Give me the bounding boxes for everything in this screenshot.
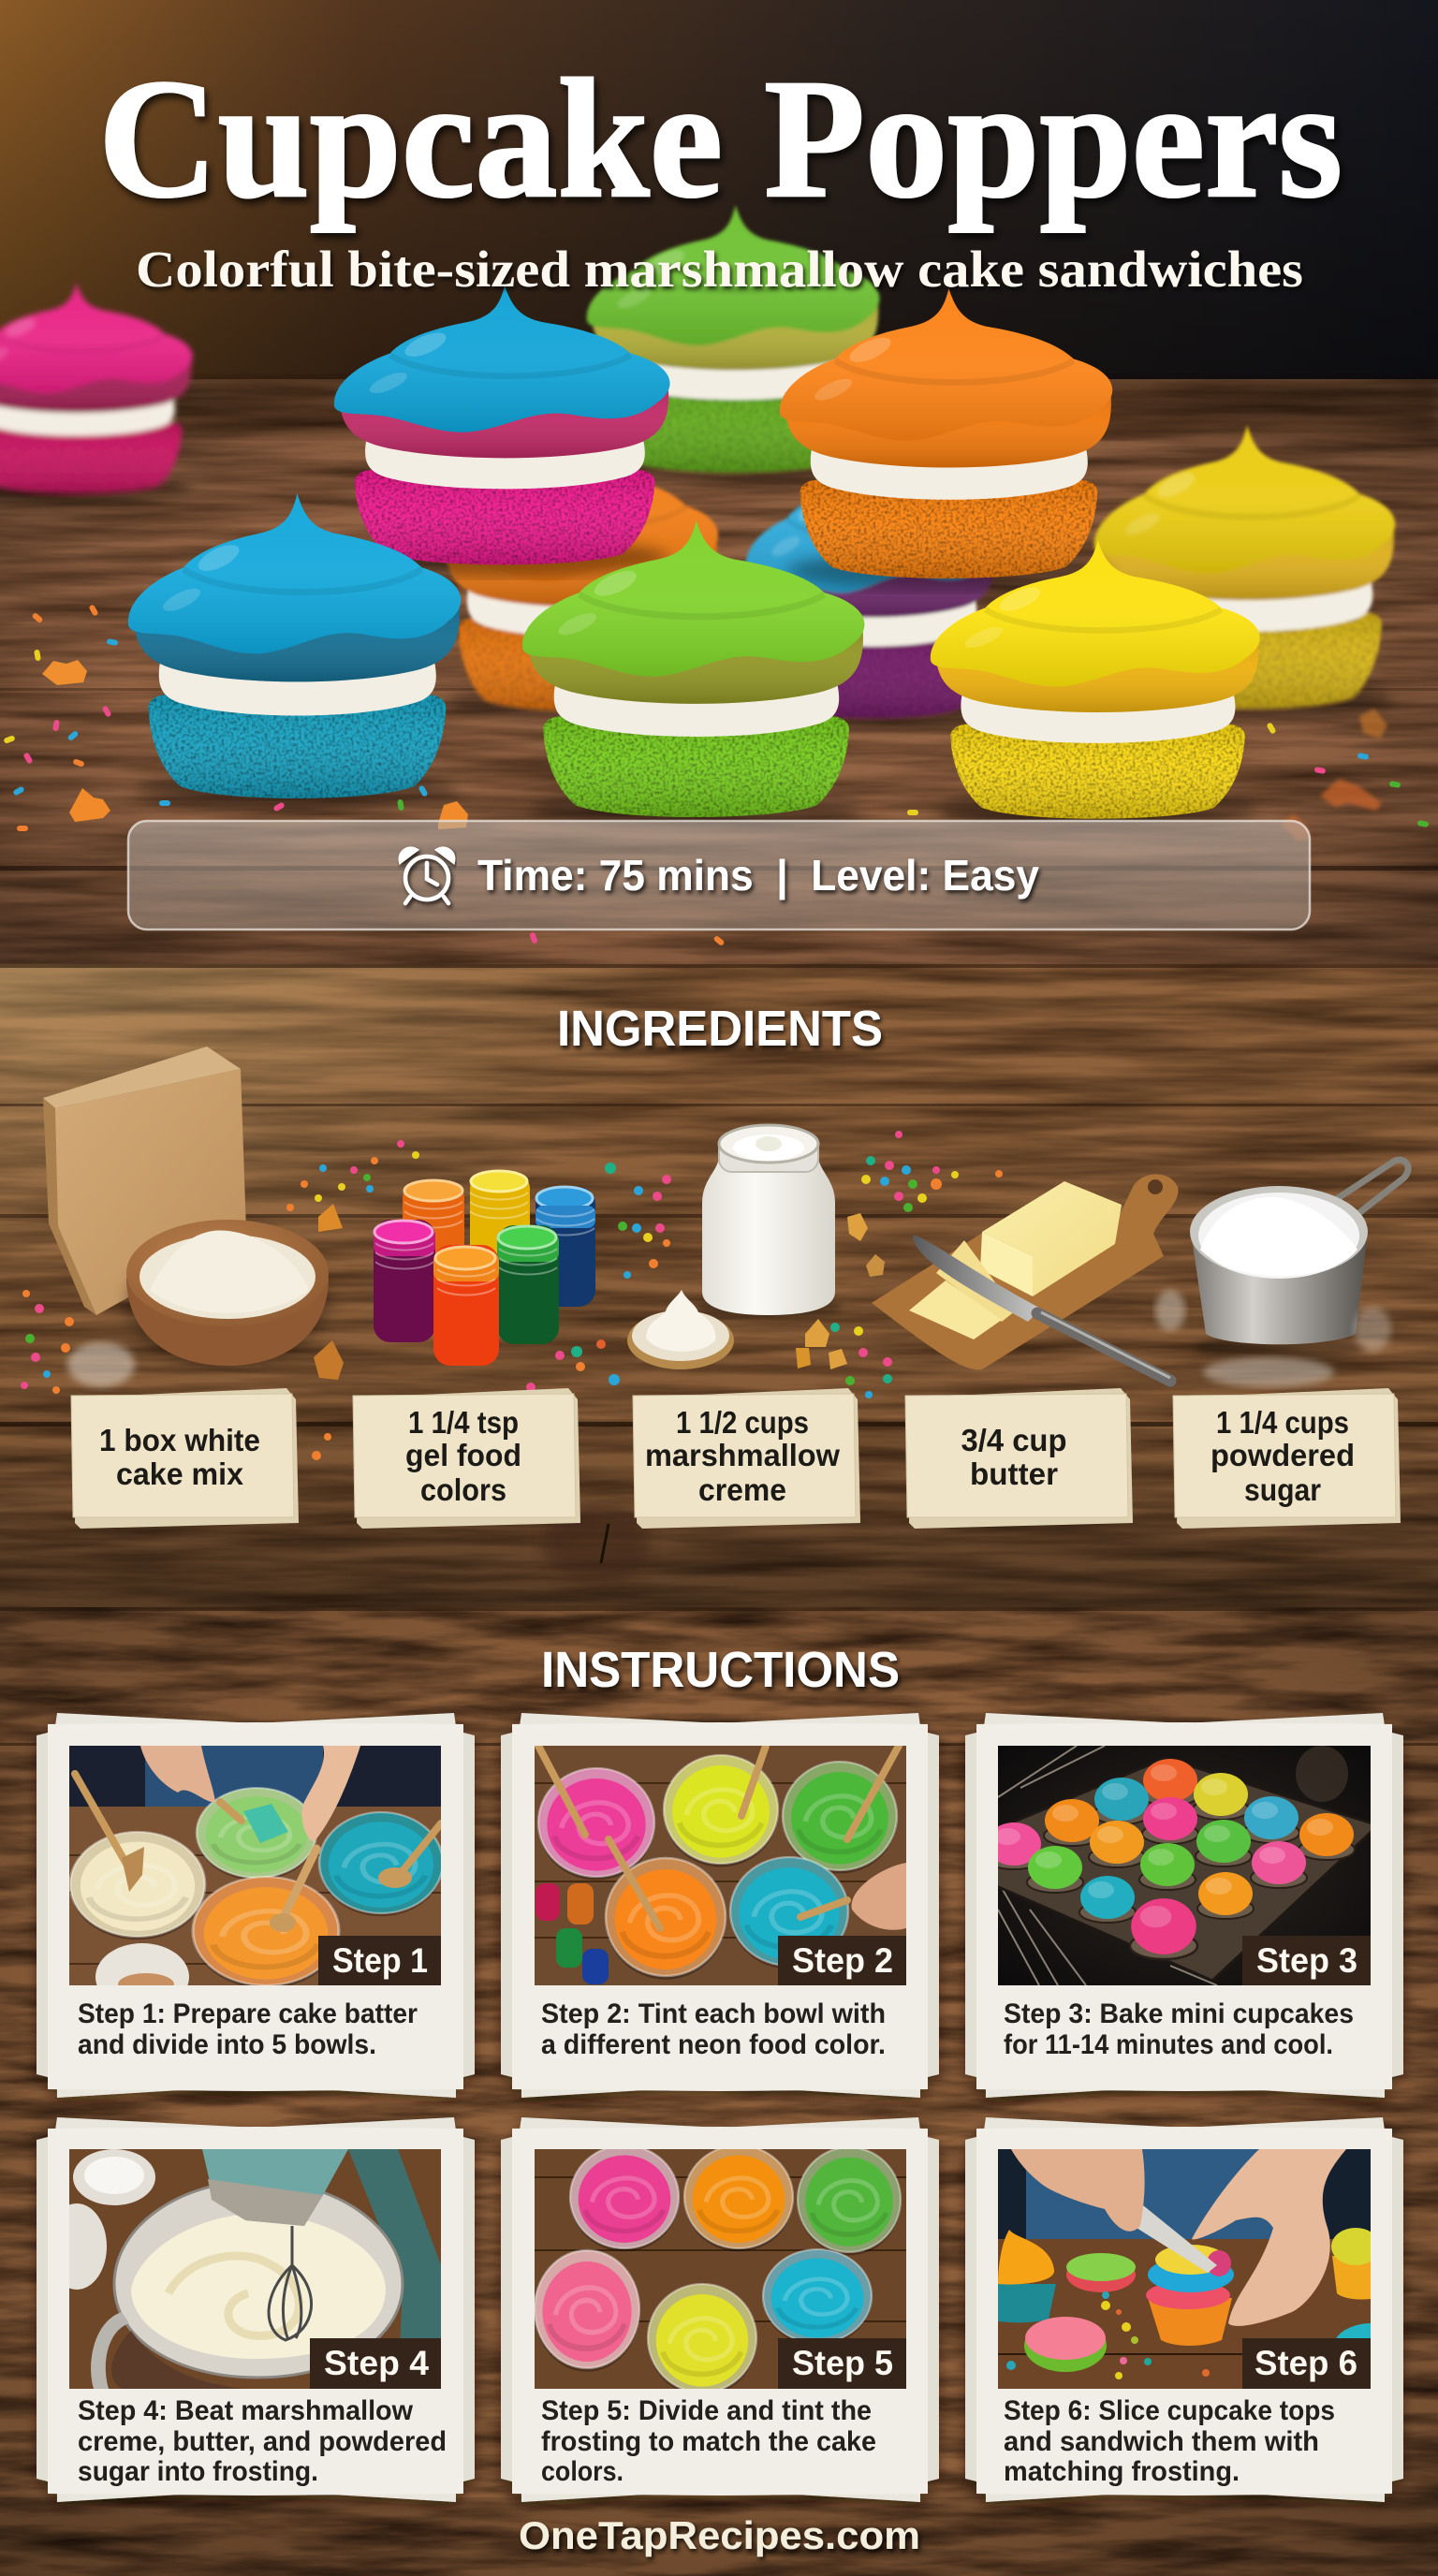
step 4 badge: Step 4 — [324, 2344, 429, 2382]
center cupcake — [1148, 2298, 1232, 2346]
ingredients section background — [0, 964, 1438, 1608]
step 2 photo: tinted batter bowls — [535, 1746, 906, 1985]
step card 2 — [501, 1713, 939, 2098]
ingredient card: cake mix — [71, 1388, 299, 1529]
step 4 photo: stand mixer whipping frosting — [47, 2149, 441, 2389]
ingredient card: butter: 3/4 cup — [961, 1423, 1067, 1457]
step 2 badge: Step 2 — [792, 1941, 893, 1980]
pink round slice — [1024, 2320, 1107, 2372]
ingredient card: food colors: gel food — [405, 1438, 521, 1472]
step 1 caption — [78, 1998, 418, 2060]
cupcake: blue front — [128, 493, 461, 811]
icon: food color bottles — [374, 1171, 595, 1366]
ingredient card: marshmallow creme: marshmallow — [645, 1438, 840, 1472]
step 2 caption: Step 2: Tint each bowl with — [541, 1998, 886, 2029]
step 6 photo: hands slicing a cupcake — [998, 2149, 1380, 2389]
scattered sprinkles and crumbs — [3, 604, 1429, 946]
step 1 badge: Step 1 — [332, 1941, 428, 1980]
cupcake: yellow front — [931, 540, 1260, 830]
heading: instructions: INSTRUCTIONS — [541, 1642, 900, 1698]
cupcake: yellow back right — [1094, 425, 1395, 720]
step 5 badge: Step 5 — [792, 2344, 893, 2382]
footer website: OneTapRecipes.com — [519, 2513, 920, 2557]
icon: bowl of flour — [126, 1220, 329, 1367]
step 4 caption: creme, butter, and powdered — [78, 2426, 447, 2457]
step 1 photo: five mixing bowls — [69, 1746, 443, 2011]
step 5 caption: frosting to match the cake — [541, 2426, 876, 2457]
left hand — [1011, 2149, 1145, 2232]
icon: marshmallow jar — [696, 1125, 842, 1318]
step card 3 — [965, 1713, 1403, 2098]
step 3 badge: Step 3 — [1256, 1941, 1357, 1980]
icon: measuring cup of powdered sugar — [1190, 1160, 1408, 1359]
step 1 badge — [318, 1936, 441, 1985]
instructions section background — [0, 1607, 1438, 2576]
step card 5 — [501, 2117, 939, 2502]
step 5 caption — [541, 2395, 876, 2487]
cupcake: blurred pink back left — [0, 283, 193, 502]
scattered sugar — [67, 1342, 135, 1387]
front row — [374, 1220, 435, 1342]
ingredient card: food colors: 1 1/4 tsp — [408, 1405, 519, 1440]
cupcake: green front — [522, 520, 864, 829]
step 5 photo: six bowls of tinted frosting — [535, 2145, 906, 2395]
ingredient card: powdered sugar: 1 1/4 cups — [1216, 1405, 1349, 1440]
step 1 caption: and divide into 5 bowls. — [78, 2029, 376, 2060]
cupcake: orange — [780, 288, 1112, 591]
ingredient card: food colors — [353, 1388, 580, 1529]
step 4 caption: Step 4: Beat marshmallow — [78, 2395, 414, 2426]
ingredient card: cake mix: cake mix — [116, 1456, 244, 1491]
cupcake: purple behind — [745, 454, 995, 729]
step 6 caption: and sandwich them with — [1004, 2426, 1319, 2457]
ingredient card: marshmallow creme: 1 1/2 cups — [676, 1405, 809, 1440]
crumbs — [42, 660, 87, 685]
step card 4 — [37, 2117, 475, 2502]
crumbs — [1102, 2291, 1109, 2299]
step 6 badge: Step 6 — [1255, 2344, 1357, 2382]
ingredient card: powdered sugar — [1173, 1388, 1401, 1529]
step 3 photo: cupcakes baking in oven — [986, 1746, 1378, 1985]
cupcake: green back — [587, 205, 880, 483]
step 6 caption — [1004, 2395, 1335, 2487]
step 5 badge — [778, 2338, 906, 2389]
back row — [403, 1181, 464, 1266]
step 3 caption: Step 3: Bake mini cupcakes — [1004, 1998, 1354, 2029]
step 5 caption: Step 5: Divide and tint the — [541, 2395, 872, 2426]
ingredient card: cake mix: 1 box white — [99, 1423, 260, 1457]
step 4 badge — [310, 2338, 441, 2389]
subtitle: Colorful bite-sized marshmallow cake sandwiches — [136, 241, 1303, 298]
ingredient card: butter — [905, 1388, 1133, 1529]
right yellow cupcake and teal corner — [1332, 2256, 1371, 2300]
step 5 caption: colors. — [541, 2456, 624, 2487]
step 3 caption — [1004, 1998, 1354, 2060]
icon: butter on cutting board with knife — [872, 1174, 1178, 1381]
hero section background — [0, 0, 1438, 964]
cupcake: orange behind — [442, 440, 718, 722]
step 2 caption: a different neon food color. — [541, 2029, 886, 2060]
step card 1 — [37, 1713, 475, 2098]
step 6 caption: Step 6: Slice cupcake tops — [1004, 2395, 1335, 2426]
knife blade — [1121, 2181, 1217, 2273]
title: Cupcake Poppers — [98, 45, 1343, 233]
step 1 caption: Step 1: Prepare cake batter — [78, 1998, 418, 2029]
ingredient card: food colors: colors — [420, 1472, 506, 1507]
step 2 caption — [541, 1998, 886, 2060]
ingredient card: marshmallow creme — [633, 1388, 860, 1529]
ingredient card: powdered sugar: sugar — [1244, 1472, 1321, 1507]
icon: cake mix box — [43, 1046, 246, 1315]
step 6 badge — [1242, 2338, 1371, 2389]
step 2 badge — [778, 1936, 906, 1985]
time and level text: Time: 75 mins | Level: Easy — [477, 851, 1039, 900]
step 4 caption: sugar into frosting. — [78, 2456, 318, 2487]
left cupcake — [998, 2284, 1056, 2322]
step card 6 — [965, 2117, 1403, 2502]
ingredient illustrations — [21, 1046, 1408, 1460]
step 4 caption — [78, 2395, 447, 2487]
icon: alarm clock — [401, 849, 453, 903]
cupcake: blue and pink — [334, 285, 670, 577]
step 3 caption: for 11-14 minutes and cool. — [1004, 2029, 1333, 2060]
time and level glass bar — [128, 821, 1310, 929]
step 6 caption: matching frosting. — [1004, 2456, 1240, 2487]
ingredient card: marshmallow creme: creme — [698, 1472, 786, 1507]
ingredient card: butter: butter — [970, 1456, 1058, 1491]
green slice — [1066, 2257, 1136, 2292]
cupcake pile illustration — [0, 205, 1395, 830]
ingredient card: powdered sugar: powdered — [1211, 1438, 1355, 1472]
sprinkle clusters — [21, 1131, 1003, 1460]
right hand — [1192, 2149, 1346, 2326]
heading: ingredients: INGREDIENTS — [557, 1001, 883, 1057]
step 3 badge — [1242, 1936, 1371, 1985]
icon: small dish of creme — [627, 1290, 734, 1369]
